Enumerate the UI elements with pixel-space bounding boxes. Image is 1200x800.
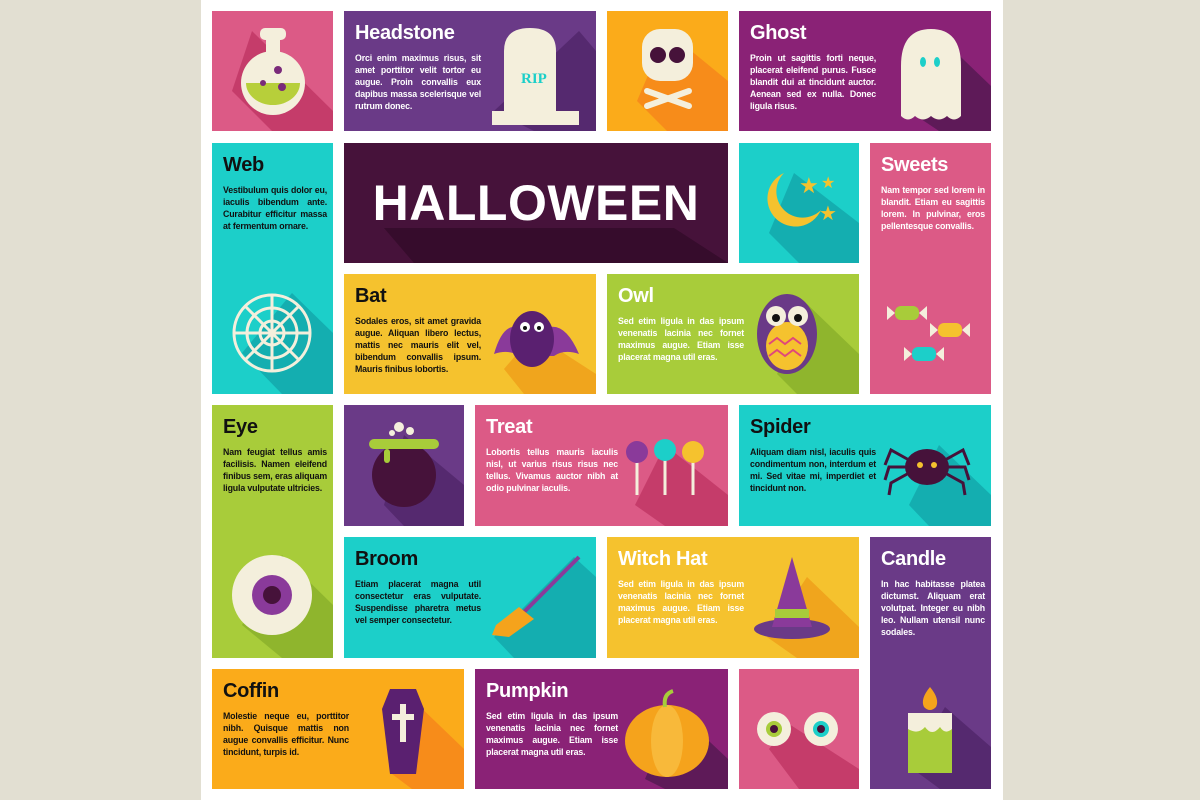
tile: headstone [344, 11, 596, 131]
tile: moon: ★ [799, 173, 819, 198]
tile: moon: ★ [819, 203, 837, 225]
tile: owl [607, 274, 859, 394]
tile: web [212, 143, 333, 394]
tile: moon [739, 143, 859, 263]
tile: eyes [739, 669, 859, 789]
tile: ghost: Ghost [750, 22, 806, 44]
tile: web: Vestibulum quis dolor eu, iaculis bibendum ante. Curabitur efficitur massa at fermentum ornare. [223, 185, 327, 231]
tile: eye: Eye [223, 416, 258, 438]
tile: eye: Nam feugiat tellus amis facilisis. Namen eleifend finibus sem, eras aliquam ligula vulputate ultricies. [223, 447, 327, 493]
tile: sweets [870, 143, 991, 394]
tile: headstone: Orci enim maximus risus, sit amet porttitor velit tortor eu augue. Proin convallis eux dapibus massa scelerisque vel rutrum donec. [355, 53, 481, 111]
title: HALLOWEEN [344, 143, 728, 263]
tile: headstone: Headstone [355, 22, 455, 44]
tile: spider: Spider [750, 416, 810, 438]
tile: candle: In hac habitasse platea dictumst. Aliquam erat volutpat. Integer eu nibh leo. Nullam utensil nunc sodales. [881, 579, 985, 637]
tile: ghost [739, 11, 991, 131]
tile: witch hat: Sed etim ligula in das ipsum venenatis lacinia nec fornet maximus augue. Etiam isse placerat magna util eras. [618, 579, 744, 625]
tile: coffin [212, 669, 464, 789]
tile: flask [212, 11, 333, 131]
tile: skull [607, 11, 728, 131]
tile: candle: Candle [881, 548, 946, 570]
tile: witch hat [607, 537, 859, 658]
tile: treat: Lobortis tellus mauris iaculis nisl, ut varius risus risus nec tellus. Vivamus auctor nibh at odio pulvinar iaculis. [486, 447, 618, 493]
tile: moon: ★ [821, 175, 835, 192]
tile: bat: Sodales eros, sit amet gravida augue. Aliquan libero lectus, mattis nec mauris elit vel, bibendum convallis ipsum. Mauris finibus lobortis. [355, 316, 481, 374]
tile: eye [212, 405, 333, 658]
tile: sweets: Sweets [881, 154, 948, 176]
tile: broom [344, 537, 596, 658]
title: HALLOWEEN: HALLOWEEN [373, 175, 699, 231]
tile: pumpkin: Pumpkin [486, 680, 568, 702]
tile: bat [344, 274, 596, 394]
tile: web: Web [223, 154, 264, 176]
tile: coffin: Molestie neque eu, porttitor nibh. Quisque mattis non augue convallis efficitur. Nunc tincidunt, turpis id. [223, 711, 349, 757]
tile: candle [870, 537, 991, 789]
tile: ghost: Proin ut sagittis forti neque, placerat eleifend purus. Fusce blandit dui at tincidunt auctor. Aenean sed ex nulla. Donec ligula risus. [750, 53, 876, 111]
tile: bat: Bat [355, 285, 386, 307]
tile: pumpkin [475, 669, 728, 789]
tile: pumpkin: Sed etim ligula in das ipsum venenatis lacinia nec fornet maximus augue. Etiam isse placerat magna util eras. [486, 711, 618, 757]
tile: cauldron [344, 405, 464, 526]
tile: treat [475, 405, 728, 526]
tile: broom: Broom [355, 548, 418, 570]
tile: coffin: Coffin [223, 680, 279, 702]
tile: broom: Etiam placerat magna util consectetur eras vulputate. Suspendisse pharetra metus vel semper consectetur. [355, 579, 481, 625]
tile: witch hat: Witch Hat [618, 548, 707, 570]
tile: sweets: Nam tempor sed lorem in blandit. Etiam eu sagittis lorem. In pulvinar, eros pellentesque convallis. [881, 185, 985, 231]
tile: spider: Aliquam diam nisl, iaculis quis condimentum non, interdum et mi. Sed vitae mi, imperdiet et tincidunt non. [750, 447, 876, 493]
tile: owl: Owl [618, 285, 654, 307]
tile: owl: Sed etim ligula in das ipsum venenatis lacinia nec fornet maximus augue. Etiam isse placerat magna util eras. [618, 316, 744, 362]
tile: treat: Treat [486, 416, 532, 438]
tile: spider [739, 405, 991, 526]
tile: headstone: RIP [521, 71, 547, 87]
